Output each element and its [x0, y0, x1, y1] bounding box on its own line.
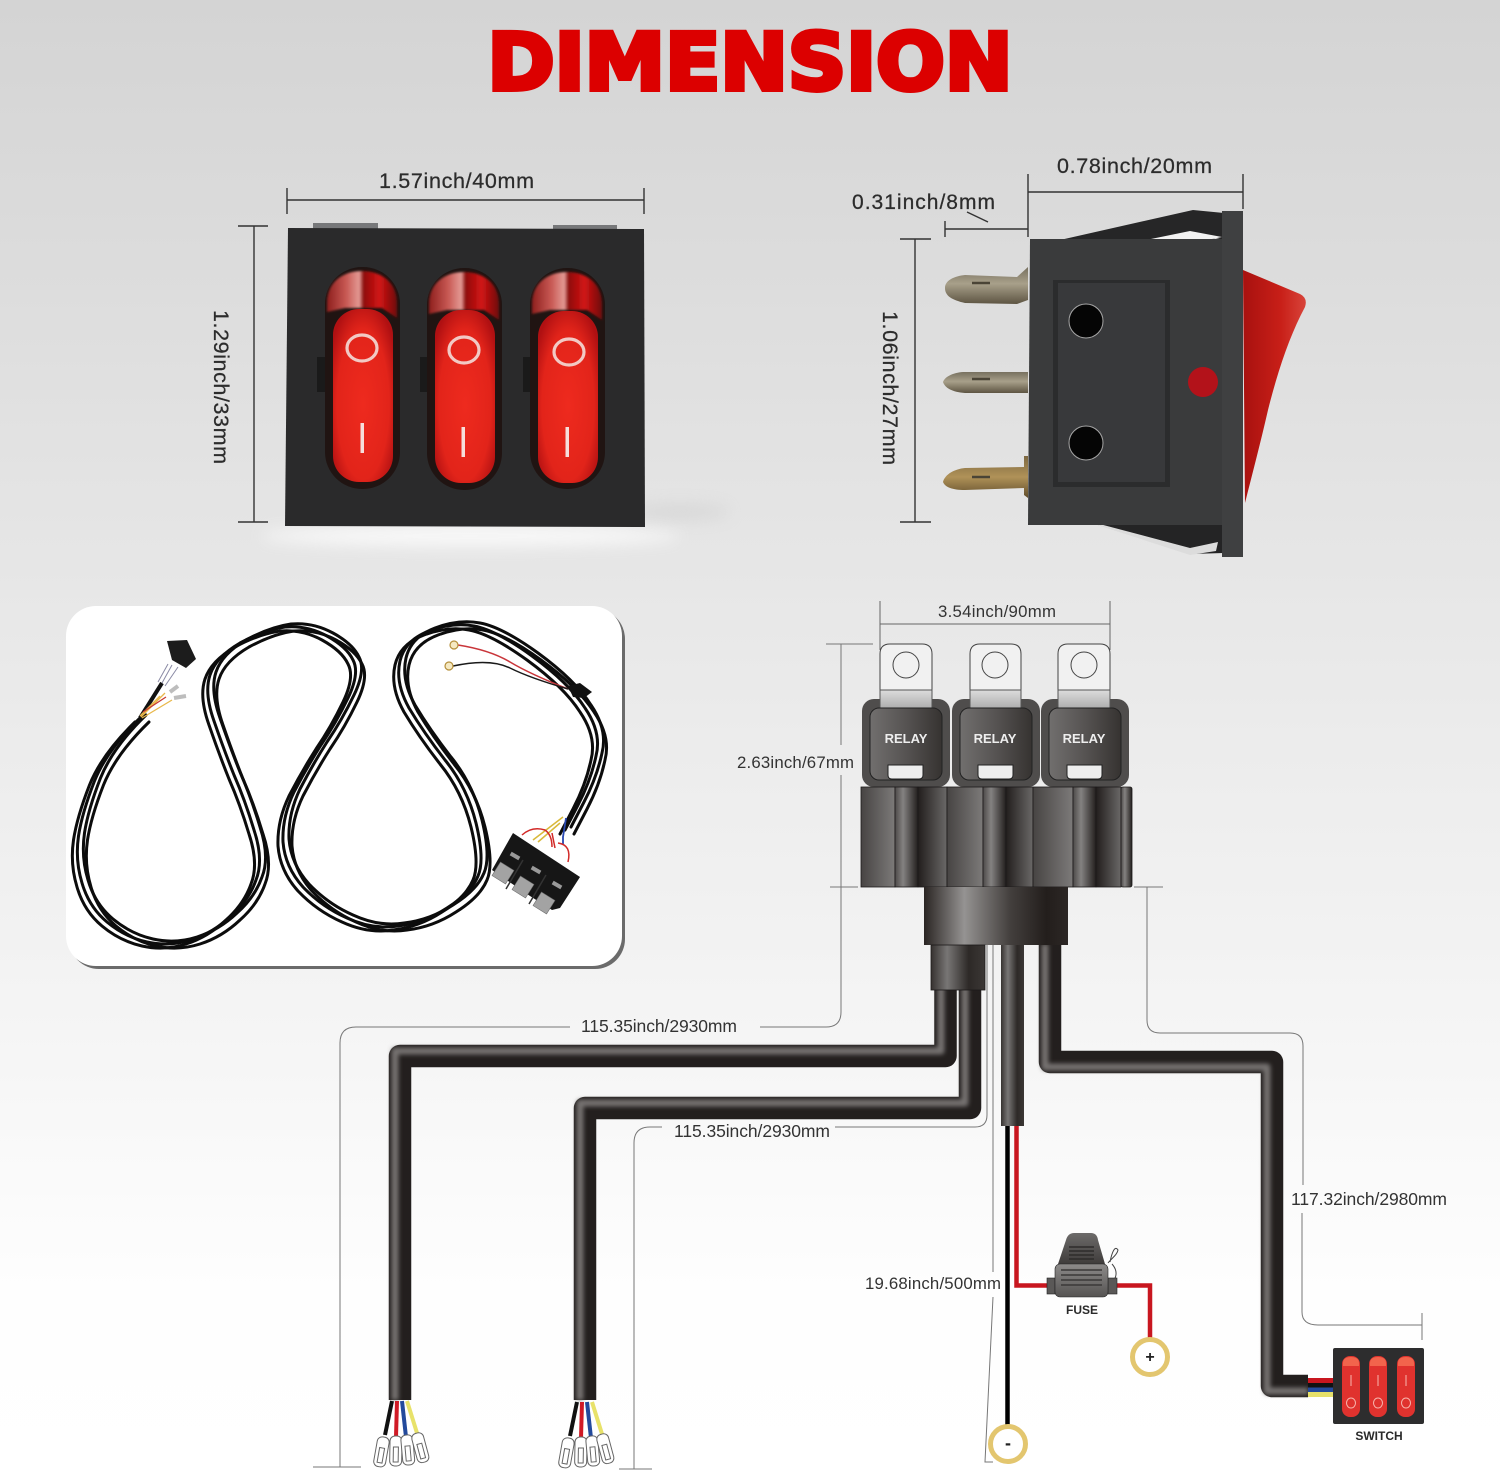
relay 1 — [862, 644, 950, 787]
cable: switch harness — [1045, 944, 1308, 1391]
relay 3 — [1041, 644, 1129, 787]
icon: mini switch — [1333, 1348, 1424, 1424]
relay block — [861, 644, 1132, 990]
icon: positive ring terminal: + — [1145, 1349, 1155, 1366]
relay sockets — [861, 787, 1132, 887]
small switch end — [140, 640, 196, 718]
mini relays — [492, 817, 580, 914]
switch body — [1028, 239, 1224, 525]
label: switch: SWITCH — [1355, 1429, 1403, 1443]
hub stub — [931, 945, 985, 990]
coiled black cables — [72, 622, 607, 948]
cable: relay 2 harness — [580, 985, 970, 1400]
heat shrink hub — [924, 887, 1068, 945]
label: fuse: FUSE — [1066, 1303, 1098, 1317]
rocker 1 — [325, 267, 400, 489]
blade terminals — [943, 267, 1028, 498]
lower bracket — [1073, 517, 1224, 554]
dimension: relay bank width — [880, 601, 1110, 650]
panel: side view of rocker switch — [943, 210, 1306, 557]
switch housing — [285, 228, 645, 527]
rocker 2 — [427, 268, 502, 490]
dimension: front height — [209, 226, 268, 522]
dimension: terminal length: 0.31inch/8mm — [852, 191, 995, 214]
icon: negative ring terminal: - — [1005, 1433, 1011, 1453]
icon: positive ring terminal — [1132, 1340, 1168, 1374]
panel: harness photo — [66, 606, 625, 969]
dimension: side width: 0.78inch/20mm — [1057, 154, 1212, 178]
relay 1: RELAY — [885, 731, 928, 746]
relay 2 — [952, 644, 1040, 787]
LED indicator — [1188, 367, 1218, 397]
upper bracket — [1060, 210, 1224, 247]
dimension: relay height with cable 1 length — [313, 644, 873, 1467]
relay 3: RELAY — [1063, 731, 1106, 746]
terminals: cable 1 end — [373, 1401, 430, 1468]
terminals: cable 2 end — [558, 1402, 615, 1469]
relay 2: RELAY — [974, 731, 1017, 746]
icon: fuse holder — [1047, 1233, 1118, 1297]
title: DIMENSION — [488, 18, 1012, 108]
inline fuse — [568, 683, 592, 698]
dimension: relay bank width: 3.54inch/90mm — [938, 602, 1056, 621]
rocker 3 — [530, 268, 605, 489]
wires: positive and ground leads — [1008, 1126, 1150, 1426]
dimension: ground wire length: 19.68inch/500mm — [865, 1274, 1001, 1293]
cable: power lead — [1001, 944, 1024, 1126]
dimension: front width: 1.57inch/40mm — [379, 169, 534, 193]
dimension: side width — [1028, 154, 1243, 209]
dimension: relay height with cable 1 length: 2.63inch/67mm — [737, 753, 854, 772]
icon: negative ring terminal — [990, 1426, 1026, 1462]
dimension: cable 2 length — [619, 945, 993, 1469]
red rocker cap — [1243, 270, 1306, 503]
mounting holes — [1069, 304, 1103, 460]
dimension: switch cable length — [1134, 887, 1447, 1340]
dimension: cable 2 length: 115.35inch/2930mm — [674, 1121, 830, 1141]
wires to mini switch — [1308, 1378, 1334, 1397]
dimension: terminal length — [852, 191, 1028, 237]
cable: relay 1 harness — [395, 985, 946, 1400]
panel: front view of triple rocker switch — [260, 223, 730, 546]
dimension: side height: 1.06inch/27mm — [878, 311, 902, 465]
inner panel — [1053, 280, 1170, 487]
dimension: front height: 1.29inch/33mm — [209, 310, 233, 464]
dimension: switch cable length: 117.32inch/2980mm — [1291, 1189, 1447, 1209]
dimension: side height — [878, 239, 931, 522]
ring terminals and wires — [445, 641, 568, 689]
flange — [1222, 211, 1243, 557]
dimension: relay height with cable 1 length: 115.35inch/2930mm — [581, 1016, 737, 1036]
dimension: front width — [287, 169, 644, 214]
